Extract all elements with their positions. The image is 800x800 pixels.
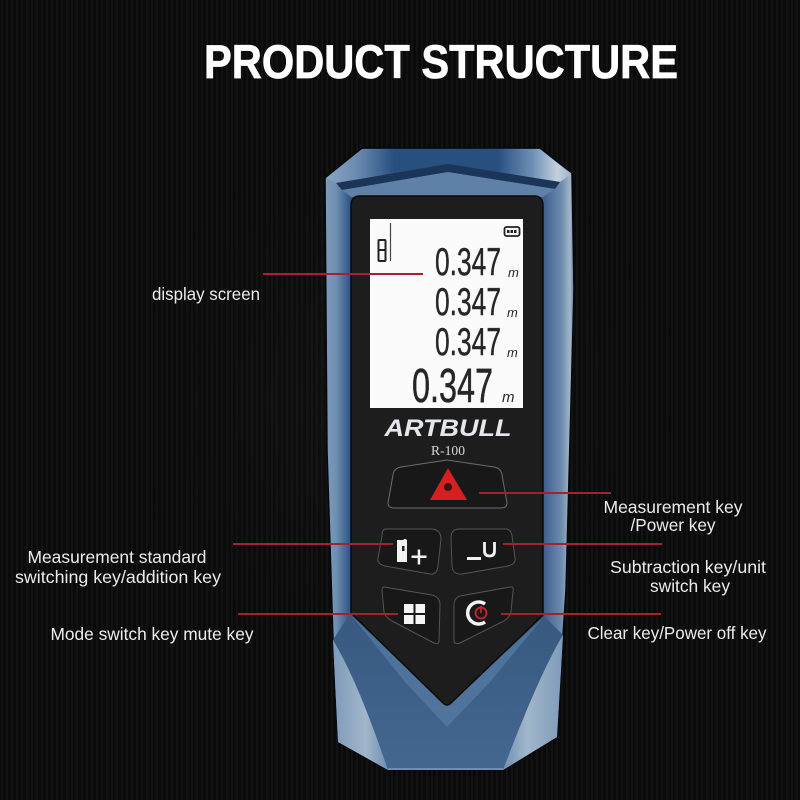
callout label: measurement key: /Power key: [630, 515, 716, 535]
callout label: measurement key: Measurement key: [604, 497, 743, 517]
callout line: mode key: [238, 613, 398, 615]
callout label: subtraction key: Subtraction key/unit: [610, 557, 766, 577]
battery icon: [504, 227, 520, 236]
readings: 0.347: [435, 241, 501, 284]
readings: 0.347: [412, 360, 493, 413]
measurement key: [388, 460, 507, 508]
callout label: clear key: Clear key/Power off key: [588, 623, 767, 643]
clear key: [454, 587, 513, 644]
model number: R-100: [431, 444, 465, 459]
readings: 0.347: [435, 321, 501, 364]
V accent below panel: [351, 615, 543, 727]
brand name: ARTBULL: [383, 415, 512, 442]
right grip highlight: [503, 635, 563, 770]
callout label: measurement key: [604, 497, 743, 535]
unit key: [451, 529, 515, 574]
black front panel: [351, 196, 543, 705]
top light wedge: [342, 172, 555, 197]
callout label: addition key: switching key/addition key: [15, 567, 221, 587]
callout label: display screen: display screen: [152, 284, 260, 304]
callout line: display screen: [263, 273, 423, 275]
readings: 0.347: [435, 281, 501, 324]
mode key: [382, 587, 440, 644]
callout label: mode key: Mode switch key mute key: [50, 624, 254, 644]
callout line: subtraction key: [503, 543, 662, 545]
display screen: [370, 219, 523, 413]
bottom edge highlight: [388, 768, 503, 770]
top cap: [326, 149, 571, 183]
readings: m: [502, 389, 514, 406]
addition key: [378, 529, 441, 574]
callout line: clear key: [501, 613, 661, 615]
top chevron groove: [336, 164, 560, 190]
readings: m: [508, 265, 519, 280]
device: laser distance meter: [325, 148, 574, 770]
callout label: addition key: Measurement standard: [28, 547, 206, 567]
mode indicator: [378, 223, 390, 261]
readings: m: [507, 345, 518, 360]
callout line: addition key: [233, 543, 393, 545]
left grip highlight: [333, 640, 388, 770]
device body: [325, 148, 574, 770]
callout label: addition key: [15, 547, 221, 587]
readings: [412, 241, 519, 413]
lower grip: [333, 612, 563, 770]
callout line: measurement key: [479, 492, 611, 494]
readings: m: [507, 305, 518, 320]
callout label: subtraction key: switch key: [650, 576, 730, 596]
callout label: subtraction key: [610, 557, 766, 596]
title: PRODUCT STRUCTURE: [204, 35, 678, 88]
